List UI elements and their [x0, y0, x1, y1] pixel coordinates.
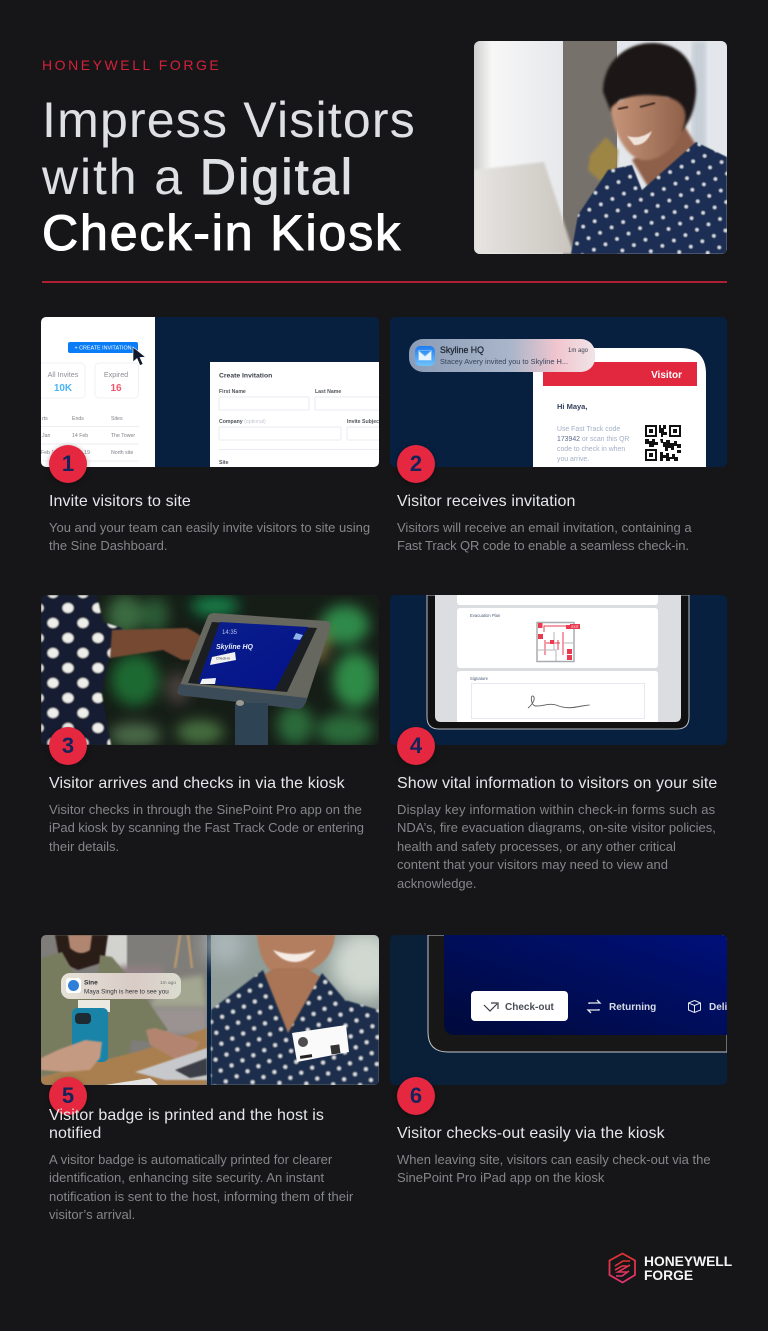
- number badge 6: 6: [410, 1083, 422, 1108]
- number badge 4: 4: [410, 733, 422, 758]
- panel image: dashboard and invitation form: + CREATE INVITATION: [74, 346, 132, 352]
- evacuation floor plan: EXIT: [571, 625, 579, 629]
- description: You and your team can easily invite visitors to site using: [49, 520, 370, 535]
- logo: Honeywell Forge: [608, 1252, 732, 1284]
- heading: Visitor receives invitation: [397, 493, 575, 510]
- signature: [528, 696, 589, 708]
- number badge 4: [397, 727, 435, 765]
- description: health and safety processes, or any other critical: [397, 839, 676, 854]
- panel image: host phone notification and visitor badge: Sine: [84, 980, 98, 986]
- QR code: [645, 425, 681, 461]
- panel image: dashboard and invitation form: 16: [110, 383, 122, 394]
- panel image: dashboard and invitation form: Last Name: [315, 389, 341, 395]
- panel image: host phone notification and visitor badge: 1m ago: [160, 980, 176, 986]
- description: visitor’s arrival.: [49, 1207, 135, 1222]
- panel image: dashboard and invitation form: Expired: [104, 370, 128, 379]
- number badge 2: [397, 445, 435, 483]
- description: [49, 802, 364, 854]
- evacuation floor plan: [537, 622, 580, 662]
- description: [397, 520, 692, 553]
- wordmark: FORGE: [644, 1268, 693, 1282]
- heading: [49, 1107, 324, 1142]
- panel image: dashboard and invitation form: [41, 317, 379, 467]
- number badge 2: 2: [410, 451, 422, 476]
- panel image: invitation email and notification: you arrive.: [557, 456, 589, 463]
- panel image: hand touching kiosk: Check-in: [216, 656, 230, 660]
- panel image: dashboard and invitation form: rts: [42, 416, 48, 422]
- title: Check-in Kiosk: [42, 205, 402, 261]
- panel image: dashboard and invitation form: Sites: [111, 416, 123, 422]
- number badge 5: 5: [62, 1083, 74, 1108]
- panel image: dashboard and invitation form: Create Invitation: [219, 372, 272, 380]
- divider rule: [42, 281, 727, 283]
- panel image: dashboard and invitation form: ar 19: [78, 450, 90, 456]
- number badge 3: [49, 727, 87, 765]
- title: Impress Visitors: [42, 92, 416, 148]
- step 1: invite visitors: [41, 317, 379, 553]
- panel image: invitation email and notification: Stacey Avery invited you to Skyline H...: [440, 357, 568, 366]
- number badge 3: 3: [62, 733, 74, 758]
- description: [49, 520, 370, 553]
- step 3: visitor arrives: [41, 595, 379, 854]
- number badge 6: [397, 1077, 435, 1115]
- panel image: dashboard and invitation form: North site: [111, 450, 133, 456]
- panel image: hand touching kiosk: [41, 595, 379, 745]
- hero photo: woman smiling at laptop: [474, 41, 727, 254]
- description: notification is sent to the host, informing them of their: [49, 1189, 353, 1204]
- panel image: tablet with evacuation plan and signature: [390, 595, 727, 745]
- panel image: kiosk check-out buttons: [390, 935, 727, 1085]
- panel image: dashboard and invitation form: Company (optional): [219, 419, 266, 425]
- panel image: invitation email and notification: Use Fast Track code: [557, 426, 620, 433]
- panel image: dashboard and invitation form: Ends: [72, 416, 84, 422]
- panel image: hand touching kiosk: Skyline HQ: [216, 644, 254, 651]
- panel image: invitation email and notification: Hi Maya,: [557, 402, 587, 411]
- title: with a Digital: [42, 148, 354, 204]
- description: acknowledge.: [397, 876, 476, 891]
- description: Visitors will receive an email invitation, containing a: [397, 520, 692, 535]
- panel image: host phone notification and visitor badge: Maya Singh is here to see you: [84, 988, 169, 996]
- panel image: tablet with evacuation plan and signature: Evacuation Plan: [470, 613, 501, 618]
- panel image: dashboard and invitation form: The Tower: [111, 433, 135, 439]
- panel image: host phone notification and visitor badge: [41, 935, 379, 1085]
- panel image: invitation email and notification: 1m ago: [568, 348, 589, 354]
- panel image: invitation email and notification: [390, 317, 727, 467]
- description: NDA’s, fire evacuation diagrams, on-site visitor policies,: [397, 820, 716, 835]
- panel image: hand touching kiosk: 14:35: [222, 630, 238, 636]
- description: content that your visitors may need to view and: [397, 857, 668, 872]
- description: SinePoint Pro iPad app on the kiosk: [397, 1170, 604, 1185]
- panel image: invitation email and notification: Skyline HQ: [440, 345, 484, 355]
- eyebrow: brand name: HONEYWELL FORGE: [42, 57, 221, 73]
- step 4: vital information: [390, 595, 727, 891]
- wordmark: HONEYWELL: [644, 1254, 732, 1269]
- heading: notified: [49, 1124, 101, 1142]
- heading: Visitor arrives and checks in via the kiosk: [49, 775, 345, 792]
- panel image: kiosk check-out buttons: Returning: [609, 1002, 656, 1013]
- description: their details.: [49, 839, 119, 854]
- description: [49, 1152, 353, 1222]
- panel image: tablet with evacuation plan and signature: Signature: [470, 676, 489, 681]
- wordmark: [644, 1254, 732, 1282]
- number badge 5: [49, 1077, 87, 1115]
- description: Fast Track QR code to enable a seamless check-in.: [397, 538, 689, 553]
- description: identification, enhancing site security. An instant: [49, 1170, 324, 1185]
- description: When leaving site, visitors can easily check-out via the: [397, 1152, 711, 1167]
- number badge 1: 1: [62, 451, 74, 476]
- panel image: invitation email and notification: 173942 or scan this QR: [557, 436, 629, 443]
- description: [397, 802, 716, 891]
- panel image: dashboard and invitation form: 10K: [54, 383, 73, 394]
- panel image: dashboard and invitation form: Feb 19: [41, 450, 57, 456]
- panel image: dashboard and invitation form: First Name: [219, 389, 246, 395]
- heading: Invite visitors to site: [49, 493, 191, 510]
- icon: hexagon mark: [608, 1252, 636, 1284]
- description: the Sine Dashboard.: [49, 538, 168, 553]
- heading: Visitor badge is printed and the host is: [49, 1107, 324, 1124]
- description: A visitor badge is automatically printed for clearer: [49, 1152, 332, 1167]
- panel image: dashboard and invitation form: 14 Feb: [72, 433, 88, 439]
- description: Display key information within check-in forms such as: [397, 802, 715, 817]
- heading: Visitor checks-out easily via the kiosk: [397, 1125, 665, 1142]
- description: iPad kiosk by scanning the Fast Track Code or entering: [49, 820, 364, 835]
- panel image: invitation email and notification: code to check in when: [557, 446, 625, 453]
- description: [397, 1152, 711, 1185]
- panel image: dashboard and invitation form: All Invites: [48, 370, 79, 379]
- step 2: visitor receives invitation: [390, 317, 727, 553]
- number badge 1: [49, 445, 87, 483]
- title: [42, 92, 416, 261]
- step 6: visitor checks out: [390, 935, 727, 1185]
- description: Visitor checks in through the SinePoint Pro app on the: [49, 802, 362, 817]
- panel image: kiosk check-out buttons: Check-out: [505, 1002, 555, 1013]
- step 5: badge printed and host notified: [41, 935, 379, 1222]
- heading: Show vital information to visitors on your site: [397, 775, 717, 792]
- panel image: dashboard and invitation form: Jan: [42, 433, 50, 439]
- panel image: dashboard and invitation form: Site: [219, 460, 229, 466]
- panel image: invitation email and notification: Visitor: [651, 370, 682, 381]
